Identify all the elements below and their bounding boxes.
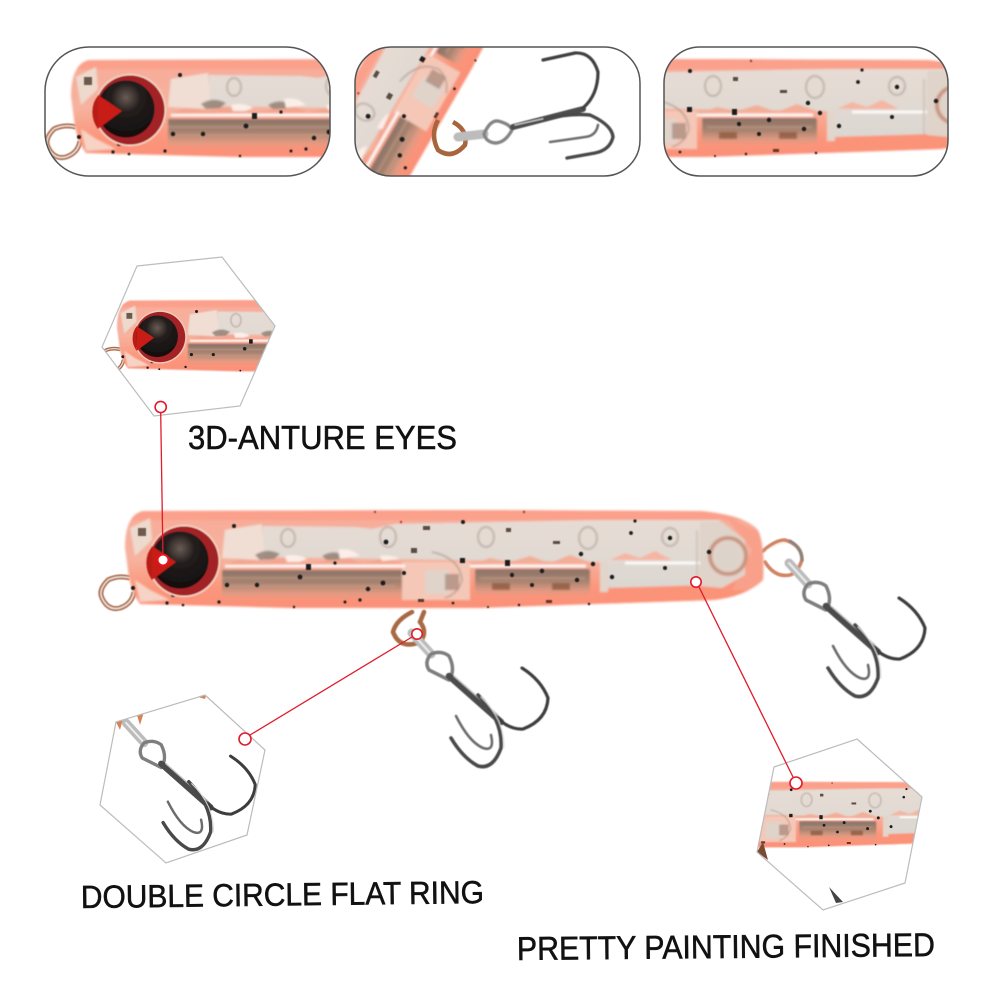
red leader line: painting xyxy=(691,577,802,789)
hexagon callout: eye xyxy=(101,256,276,417)
panel: eye close-up xyxy=(44,46,331,177)
hexagon callout: painting xyxy=(756,738,923,910)
panel: body finish close-up xyxy=(663,46,949,177)
main lure with hooks xyxy=(101,510,925,767)
label: ring: DOUBLE CIRCLE FLAT RING xyxy=(81,874,484,915)
hexagon callout: hook xyxy=(100,693,265,863)
red leader line: eye xyxy=(155,401,168,566)
label: eyes: 3D-ANTURE EYES xyxy=(188,419,457,456)
label: painting: PRETTY PAINTING FINISHED xyxy=(517,926,935,967)
panel: belly ring and hook close-up xyxy=(354,46,641,177)
red leader line: ring xyxy=(239,629,422,745)
